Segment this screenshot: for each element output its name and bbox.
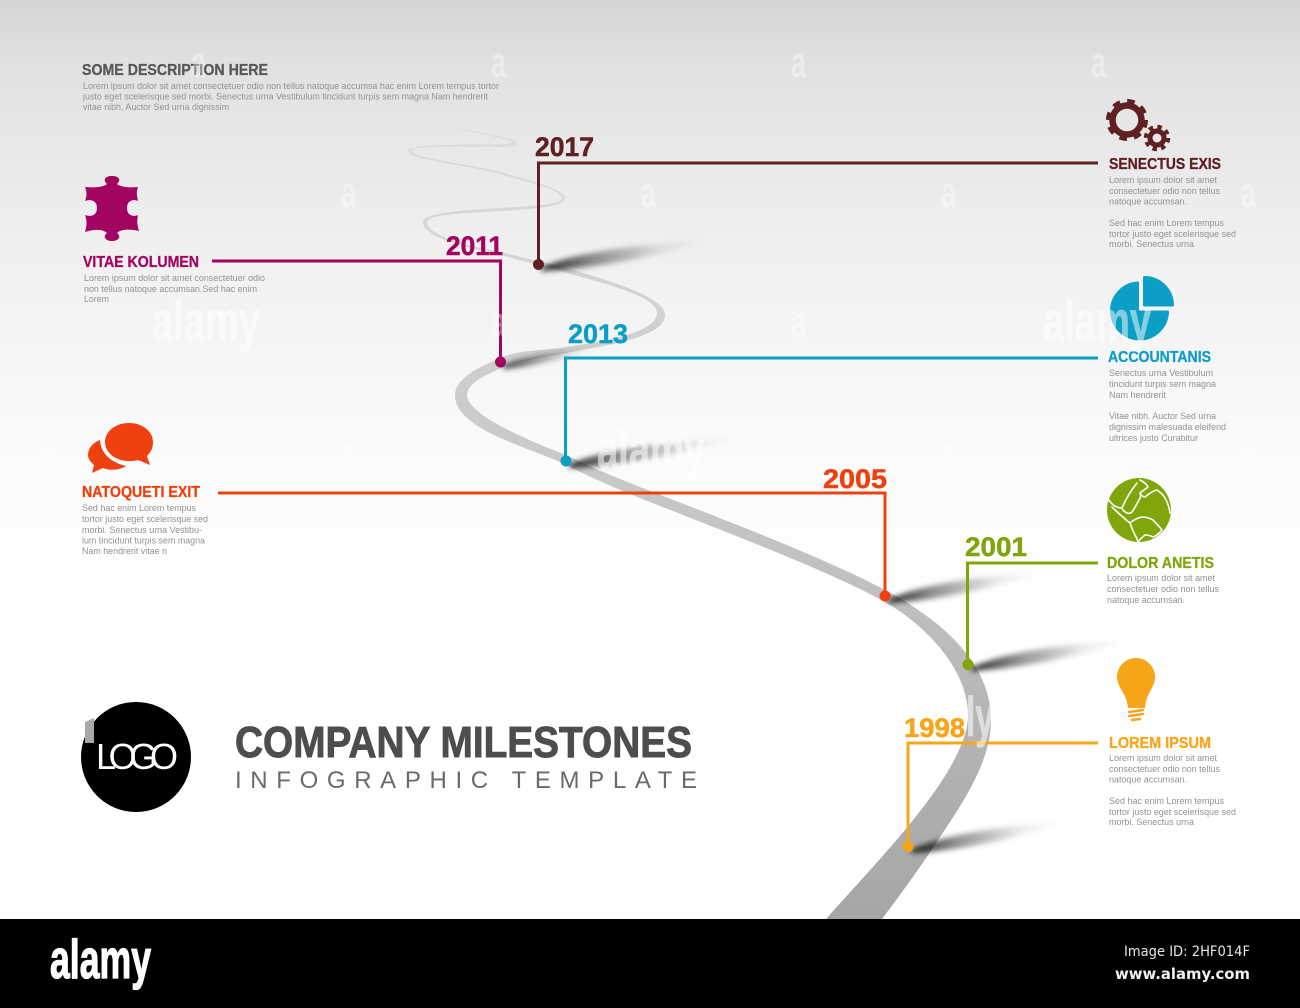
stock watermarks: a xyxy=(791,38,806,87)
body text: Lorem ipsum dolor sit amet xyxy=(1109,174,1217,185)
heading: LOREM IPSUM xyxy=(1109,735,1211,752)
stock watermarks: alamy xyxy=(152,289,260,352)
stock watermarks: a xyxy=(641,168,656,217)
icon: pie chart xyxy=(1112,278,1172,339)
stock watermarks xyxy=(41,38,1256,748)
panel: accountanis xyxy=(1108,278,1226,443)
heading: NATOQUETI EXIT xyxy=(82,484,200,501)
body text: Lorem ipsum dolor sit amet xyxy=(1107,572,1215,583)
icon: globe xyxy=(1107,478,1171,542)
body text: morbi. Senectus urna xyxy=(1109,238,1195,249)
milestone shadows xyxy=(503,240,1131,853)
body text: natoque accumsan. xyxy=(1109,774,1187,784)
body text xyxy=(1109,174,1236,249)
stock watermarks: a xyxy=(491,38,506,87)
panel: natoqueti exit xyxy=(82,423,208,556)
body text: Nam hendrerit vitae n xyxy=(82,545,167,556)
stock watermarks: a xyxy=(1241,168,1256,217)
body text: lum tincidunt turpis sem magna xyxy=(82,534,206,546)
image id: Image ID: 2HF014F xyxy=(1124,944,1250,960)
body text: Vitae nibh. Auctor Sed urna xyxy=(1109,410,1217,421)
milestone 2001: 2001 xyxy=(965,532,1027,562)
panel: lorem ipsum xyxy=(1109,658,1236,827)
panel: vitae kolumen xyxy=(83,176,265,304)
body text: consectetuer odio non tellus xyxy=(1107,583,1219,594)
body text: Senectus urna Vestibulum xyxy=(1109,367,1213,378)
footer bar xyxy=(0,919,1300,1008)
title: COMPANY MILESTONES xyxy=(235,718,692,767)
stock watermarks: a xyxy=(491,298,506,347)
stock watermarks: a xyxy=(941,428,956,477)
body text: morbi. Senectus urna xyxy=(1109,816,1195,827)
stock watermarks: a xyxy=(41,428,56,477)
milestone 2013 xyxy=(560,319,1098,466)
body text: ultrices justo Curabitur xyxy=(1109,432,1198,443)
stock watermarks: a xyxy=(941,168,956,217)
body text: tortor justo eget scelerisque sed xyxy=(82,513,208,524)
logo xyxy=(81,702,191,812)
stock watermarks: a xyxy=(1091,38,1106,87)
body text xyxy=(1109,752,1236,827)
milestone 2017 xyxy=(533,132,1098,270)
body text: consectetuer odio non tellus xyxy=(1109,185,1220,196)
heading: VITAE KOLUMEN xyxy=(83,254,199,271)
site url: www.alamy.com xyxy=(1115,965,1250,983)
stock watermarks: a xyxy=(191,38,206,87)
milestone 2013: 2013 xyxy=(568,319,628,349)
description block: Lorem ipsum dolor sit amet consectetuer odio non tellus natoque accumsa hac enim Lorem tempus tortor xyxy=(83,80,499,91)
icon: puzzle piece xyxy=(85,176,139,241)
body text: Sed hac enim Lorem tempus xyxy=(1109,795,1224,806)
body text: Sed hac enim Lorem tempus xyxy=(1109,217,1224,228)
milestone 2011: 2011 xyxy=(446,231,503,261)
body text: tortor justo eget scelerisque sed xyxy=(1109,228,1236,239)
body text: Lorem ipsum dolor sit amet consectetuer odio xyxy=(84,272,265,283)
panel: senectus exis xyxy=(1108,102,1236,249)
body text: non tellus natoque accumsan.Sed hac enim xyxy=(84,283,257,294)
heading: ACCOUNTANIS xyxy=(1108,349,1211,366)
panel: dolor anetis xyxy=(1107,478,1219,605)
alamy wordmark: alamy xyxy=(50,928,151,990)
description block: vitae nibh. Auctor Sed urna dignissim xyxy=(83,101,229,112)
milestone 2011 xyxy=(212,231,506,368)
body text: dignissim malesuada eleifend xyxy=(1109,421,1226,432)
milestone 1998: 1998 xyxy=(904,713,965,743)
body text: Nam hendrerit xyxy=(1109,389,1166,400)
stock watermarks: alamy xyxy=(597,417,705,480)
milestone 2005 xyxy=(218,464,890,602)
body text xyxy=(1107,572,1219,605)
body text: consectetuer odio non tellus xyxy=(1109,763,1220,774)
body text: Sed hac enim Lorem tempus xyxy=(82,502,196,513)
logo: LOGO xyxy=(96,736,178,777)
subtitle: INFOGRAPHIC TEMPLATE xyxy=(235,767,697,794)
body text: Lorem xyxy=(84,293,109,304)
body text: morbi. Senectus urna Vestibu- xyxy=(82,524,202,535)
heading: DOLOR ANETIS xyxy=(1107,555,1214,572)
page background xyxy=(0,0,1300,612)
icon: light bulb xyxy=(1117,658,1155,720)
stock watermarks: alamy xyxy=(1043,289,1151,352)
body text xyxy=(84,272,265,304)
icon: gears xyxy=(1108,102,1168,149)
body text: natoque accumsan. xyxy=(1107,594,1185,605)
heading: SENECTUS EXIS xyxy=(1109,156,1221,173)
stock watermarks: a xyxy=(341,428,356,477)
body text: Lorem ipsum dolor sit amet xyxy=(1109,752,1217,763)
body text: tincidunt turpis sem magna xyxy=(1109,378,1217,389)
body text xyxy=(82,502,208,556)
winding road xyxy=(408,122,991,919)
stock watermarks: a xyxy=(1241,428,1256,477)
body text: tortor justo eget scelerisque sed xyxy=(1109,806,1236,817)
milestone 1998 xyxy=(902,713,1098,852)
milestone 2005: 2005 xyxy=(823,464,887,494)
description block: justo eget scelerisque sed morbi. Senectus urna Vestibulum tincidunt turpis sem magna Nam hendrerit xyxy=(82,90,488,102)
body text: natoque accumsan. xyxy=(1109,196,1187,206)
stock watermarks: a xyxy=(341,168,356,217)
stock watermarks: a xyxy=(791,298,806,347)
icon: speech bubbles xyxy=(88,423,153,473)
milestone 2017: 2017 xyxy=(535,132,594,162)
description block: SOME DESCRIPTION HERE xyxy=(82,62,268,79)
body text xyxy=(1109,367,1226,443)
description block xyxy=(82,62,499,112)
stock watermarks: ly xyxy=(966,685,994,748)
milestone 2001 xyxy=(962,532,1098,670)
